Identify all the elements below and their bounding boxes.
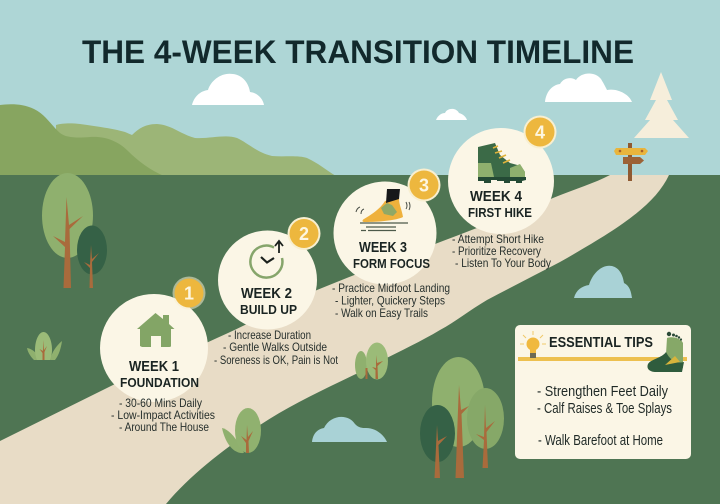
- tip list: - Calf Raises & Toe Splays: [537, 400, 672, 417]
- tip list: - Walk Barefoot at Home: [538, 432, 663, 449]
- icon: light bulb: [520, 331, 546, 358]
- cloud: right: [574, 266, 632, 298]
- bullets: week 2: - Increase Duration: [228, 328, 311, 342]
- icon: house: [137, 313, 174, 347]
- bullets: week 2: [214, 328, 339, 367]
- bullets: week 3: - Lighter, Quickery Steps: [335, 294, 445, 308]
- winding path: [0, 175, 669, 504]
- tip list: - Strengthen Feet Daily: [537, 383, 668, 400]
- cloud: small centre: [436, 109, 467, 120]
- bullets: week 2: - Gentle Walks Outside: [223, 340, 327, 354]
- panel: essential tips: [515, 325, 691, 459]
- bullets: week 1: - Around The House: [119, 420, 209, 434]
- pine tree: [634, 72, 689, 138]
- panel background: [515, 325, 691, 459]
- cloud: bottom centre: [312, 417, 387, 442]
- badge: 4: [524, 116, 556, 148]
- hills: [0, 104, 336, 176]
- subheading: first hike: FIRST HIKE: [468, 205, 532, 220]
- cloud: upper right: [545, 73, 632, 102]
- heading bar: [518, 357, 687, 361]
- week 1 milestone: [100, 276, 215, 434]
- shrub: road edge: [355, 342, 388, 380]
- tree group: lower right: [420, 357, 504, 478]
- bullets: week 1: - 30-60 Mins Daily: [119, 396, 202, 410]
- badge: 2: [288, 217, 320, 250]
- badge: 3: 3: [419, 176, 429, 196]
- icon: hiking boot: [478, 143, 526, 183]
- badge: 3: [408, 168, 440, 202]
- week 2 milestone: [214, 217, 339, 367]
- circle: week 4: [448, 128, 554, 234]
- signpost: [614, 143, 648, 181]
- week 3 milestone: [332, 168, 450, 320]
- bullets: week 4: - Prioritize Recovery: [452, 244, 541, 258]
- heading: week 3: WEEK 3: [359, 239, 407, 256]
- bullets: week 2: - Soreness is OK, Pain is Not: [214, 353, 339, 367]
- bullets: week 1: - Low-Impact Activities: [111, 408, 215, 422]
- ground: [0, 175, 720, 504]
- bullets: week 4: - Listen To Your Body: [455, 256, 551, 270]
- shrub: left meadow: [27, 332, 62, 360]
- badge: 1: 1: [184, 284, 194, 304]
- bullets: week 3: - Walk on Easy Trails: [335, 306, 428, 320]
- circle: week 2: [218, 230, 317, 330]
- heading: week 2: WEEK 2: [241, 285, 292, 302]
- subheading: form focus: FORM FOCUS: [353, 256, 430, 271]
- badge: 4: 4: [535, 122, 545, 142]
- subheading: foundation: FOUNDATION: [120, 375, 199, 390]
- circle: week 3: [334, 182, 436, 284]
- week 4 milestone: [448, 116, 556, 270]
- bullets: week 4: - Attempt Short Hike: [452, 232, 544, 246]
- icon: foot: [356, 189, 410, 230]
- bullets: week 3: [332, 281, 450, 320]
- subheading: build up: BUILD UP: [240, 302, 297, 317]
- icon: clock with arrow: [250, 241, 283, 278]
- bullets: week 3: - Practice Midfoot Landing: [332, 281, 450, 295]
- heading: week 4: WEEK 4: [470, 188, 523, 205]
- icon: foot and sock: [647, 332, 684, 372]
- bullets: week 1: [111, 396, 215, 434]
- bullets: week 4: [452, 232, 551, 270]
- badge: 2: 2: [299, 224, 309, 244]
- badge: 1: [172, 276, 206, 310]
- title: THE 4-WEEK TRANSITION TIMELINE: [82, 34, 634, 70]
- tree group: upper left: [42, 173, 107, 288]
- heading: essential tips: ESSENTIAL TIPS: [549, 334, 653, 351]
- tip list: [537, 383, 672, 449]
- circle: week 1: [100, 294, 208, 402]
- sky background: [0, 0, 720, 176]
- heading: week 1: WEEK 1: [129, 358, 179, 375]
- cloud: upper left: [192, 74, 264, 105]
- shrub: beside road: [222, 408, 261, 453]
